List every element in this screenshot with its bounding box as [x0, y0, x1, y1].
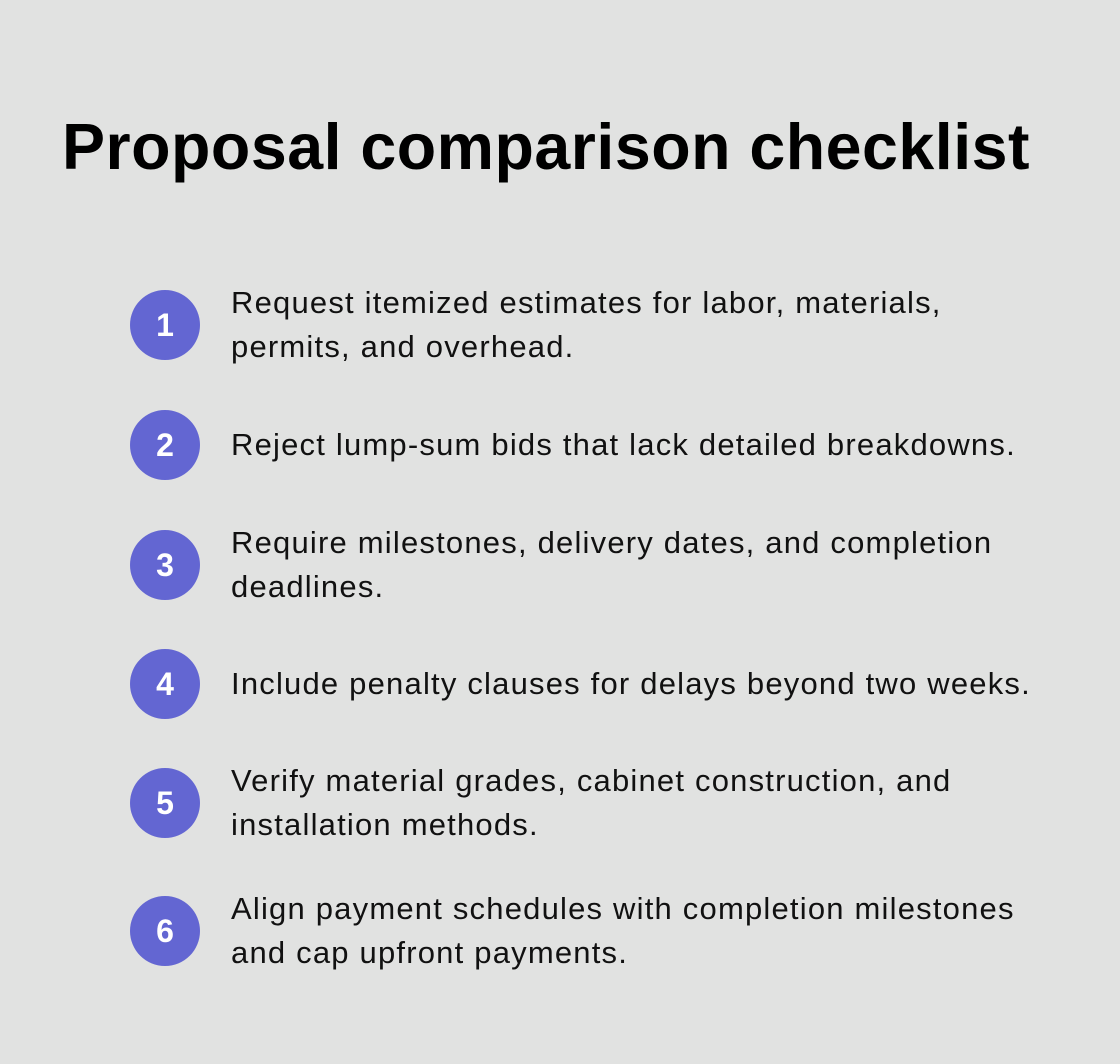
badge 1 [130, 290, 200, 360]
item 3 [130, 525, 992, 604]
item 1 [130, 285, 942, 364]
item 6 [130, 891, 1015, 970]
text 3: deadlines. [231, 569, 384, 604]
badge 6: 6 [156, 913, 174, 949]
text 1: Request itemized estimates for labor, materials, [231, 285, 942, 320]
item 5 [130, 763, 952, 842]
text 1: permits, and overhead. [231, 329, 574, 364]
text 1 [231, 285, 942, 364]
text 5: installation methods. [231, 807, 539, 842]
badge 2 [130, 410, 200, 480]
item 4 [130, 649, 1031, 719]
text 2: Reject lump-sum bids that lack detailed breakdowns. [231, 427, 1016, 462]
title: Proposal comparison checklist [62, 111, 1030, 183]
badge 5: 5 [156, 785, 174, 821]
text 3: Require milestones, delivery dates, and completion [231, 525, 992, 560]
badge 3 [130, 530, 200, 600]
badge 6 [130, 896, 200, 966]
text 5 [231, 763, 952, 842]
badge 3: 3 [156, 547, 174, 583]
text 6: Align payment schedules with completion milestones [231, 891, 1015, 926]
text 6 [231, 891, 1015, 970]
badge 2: 2 [156, 427, 174, 463]
item 2 [130, 410, 1016, 480]
text 3 [231, 525, 992, 604]
text 5: Verify material grades, cabinet construction, and [231, 763, 952, 798]
badge 4: 4 [156, 666, 174, 702]
text 6: and cap upfront payments. [231, 935, 628, 970]
badge 5 [130, 768, 200, 838]
badge 1: 1 [156, 307, 174, 343]
text 4: Include penalty clauses for delays beyond two weeks. [231, 666, 1031, 701]
badge 4 [130, 649, 200, 719]
